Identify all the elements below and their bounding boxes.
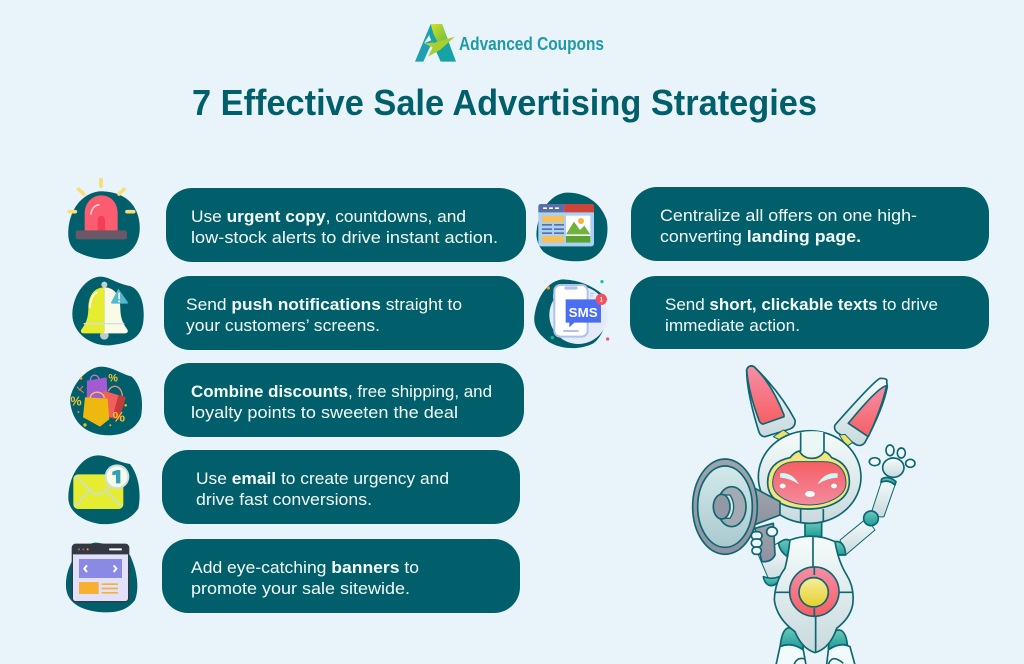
panel: banners bbox=[162, 539, 520, 613]
panel: email bbox=[162, 450, 520, 524]
panel: combine discounts: loyalty points to sweeten the deal bbox=[191, 403, 458, 422]
robot megaphone bbox=[693, 459, 780, 562]
robot legs bbox=[776, 628, 855, 664]
robot raised arm bbox=[834, 445, 915, 555]
robot head bbox=[758, 431, 861, 523]
icon: web banner bbox=[66, 543, 137, 612]
panel: email: drive fast conversions. bbox=[196, 490, 372, 509]
robot ears bbox=[747, 366, 887, 447]
icon: SMS phone: 1 bbox=[600, 297, 604, 304]
panel: landing page: Centralize all offers on one high- bbox=[660, 206, 917, 225]
panel: banners: Add eye-catching banners to bbox=[191, 558, 419, 577]
illustration: robot mascot with megaphone bbox=[693, 366, 915, 664]
panel: banners: promote your sale sitewide. bbox=[191, 579, 410, 598]
panel: SMS texts bbox=[630, 276, 989, 349]
logo wordmark: Advanced Coupons bbox=[459, 34, 604, 54]
panel: urgent copy bbox=[166, 188, 526, 262]
icon: shopping bags and discounts: % bbox=[108, 372, 118, 384]
logo: Advanced Coupons bbox=[415, 24, 604, 62]
icon: SMS phone: SMS bbox=[569, 306, 598, 320]
icon: siren bbox=[68, 180, 140, 259]
panel: SMS texts: immediate action. bbox=[665, 316, 800, 335]
icon: shopping bags and discounts bbox=[70, 367, 142, 435]
icon: shopping bags and discounts: % bbox=[70, 395, 82, 409]
panel: combine discounts bbox=[164, 363, 524, 437]
panel: email: Use email to create urgency and bbox=[196, 469, 449, 488]
robot torso bbox=[774, 536, 853, 653]
icon: SMS phone bbox=[534, 279, 609, 348]
robot neck bbox=[805, 522, 822, 537]
panel: SMS texts: Send short, clickable texts to drive bbox=[665, 295, 938, 314]
panel: urgent copy: Use urgent copy, countdowns, and bbox=[191, 207, 466, 226]
logo mark bbox=[415, 24, 456, 62]
panel: push notifications bbox=[164, 276, 524, 350]
panel: landing page bbox=[631, 187, 989, 261]
panel: combine discounts: Combine discounts, free shipping, and bbox=[191, 382, 492, 401]
panel: urgent copy: low-stock alerts to drive instant action. bbox=[191, 228, 498, 247]
icon: notification bell bbox=[72, 277, 144, 345]
panel: push notifications: Send push notifications straight to bbox=[186, 295, 462, 314]
robot holding arm bbox=[758, 540, 791, 586]
icon: shopping bags and discounts: % bbox=[113, 409, 126, 425]
icon: landing page bbox=[536, 193, 607, 261]
icon: email envelope bbox=[68, 455, 140, 524]
title: 7 Effective Sale Advertising Strategies bbox=[192, 82, 817, 123]
panel: push notifications: your customers’ screens. bbox=[186, 316, 380, 335]
panel: landing page: converting landing page. bbox=[660, 227, 861, 246]
